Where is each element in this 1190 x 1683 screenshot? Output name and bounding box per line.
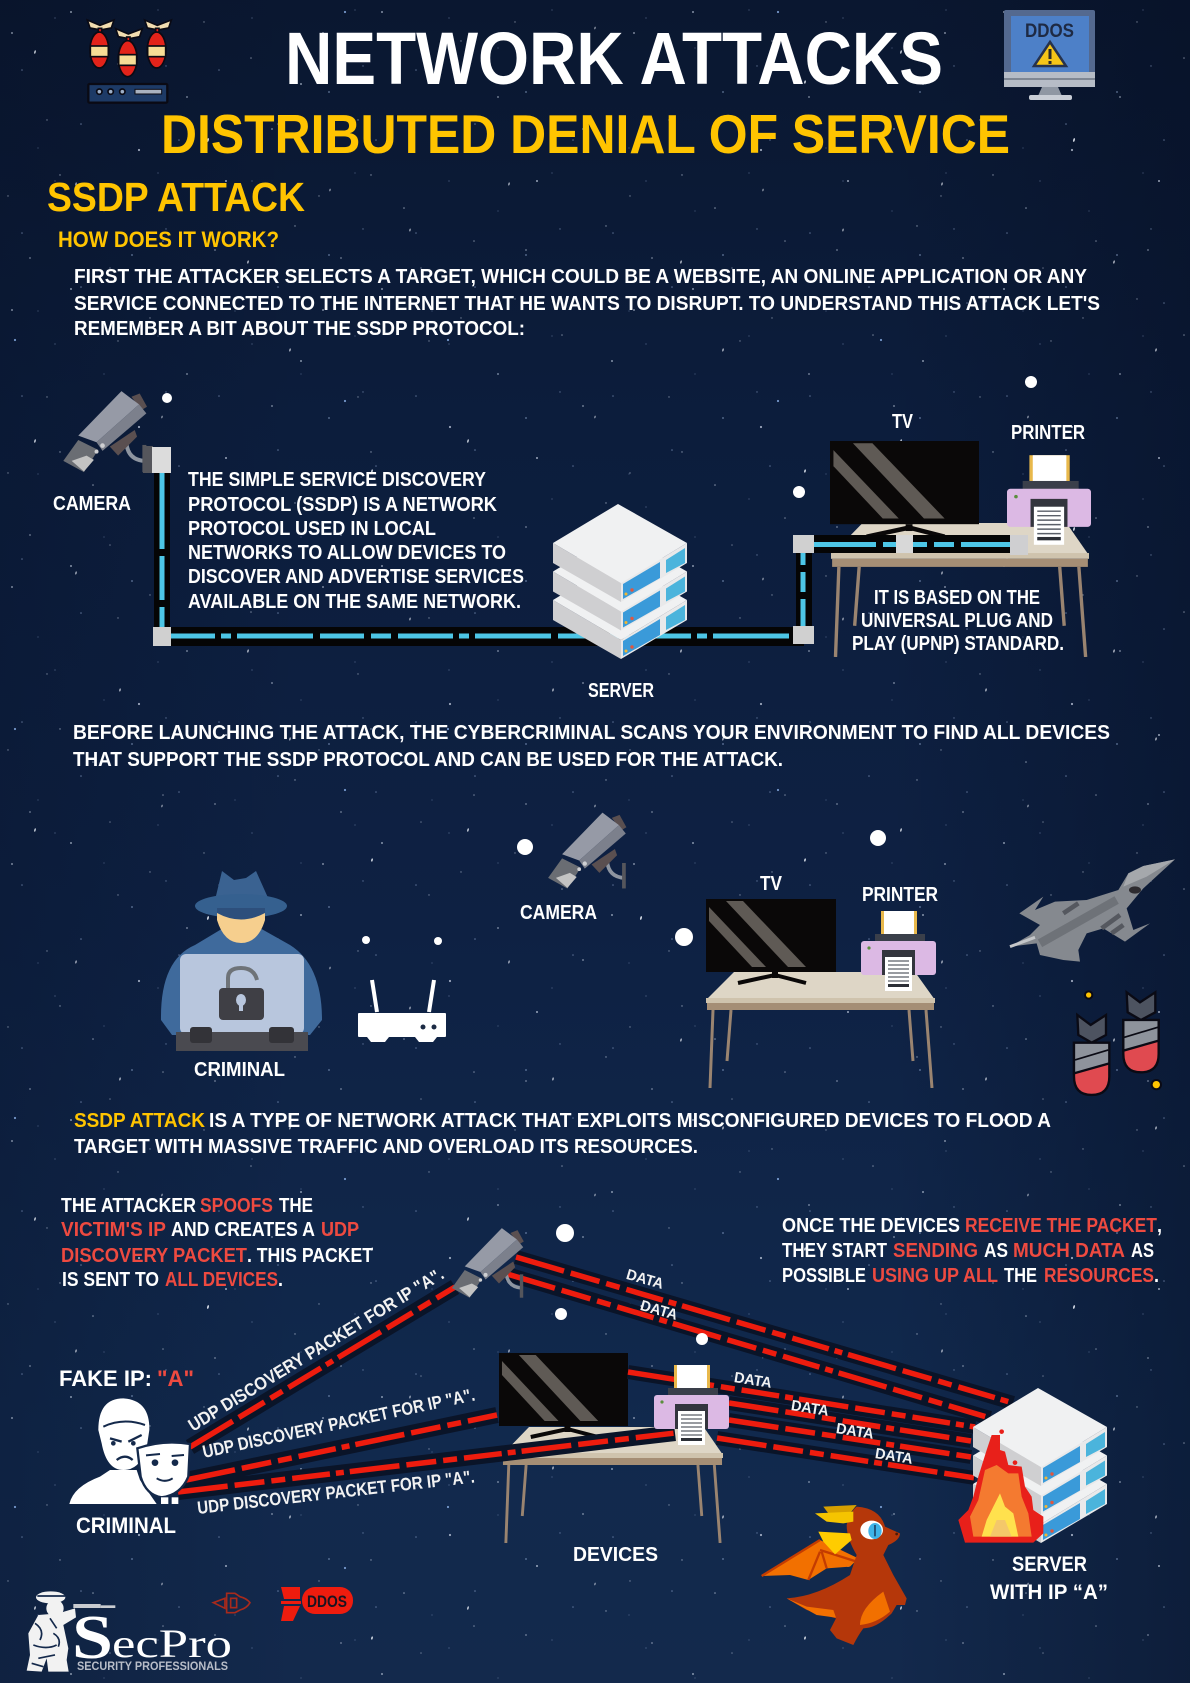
logo: SecPro: ecPro bbox=[112, 1621, 232, 1666]
icon: DDOS bomb bbox=[281, 1587, 353, 1621]
SSDP description: DISCOVER AND ADVERTISE SERVICES bbox=[188, 566, 524, 588]
label: fake IP: FAKE IP: bbox=[59, 1366, 152, 1391]
icon: falling bombs bbox=[1074, 991, 1161, 1095]
logo: SecPro: SECURITY PROFESSIONALS bbox=[77, 1661, 228, 1673]
devices explanation: , bbox=[1157, 1215, 1162, 1237]
SSDP attack definition bbox=[74, 1110, 1051, 1158]
icon: fighter jet bbox=[1010, 859, 1175, 962]
devices explanation: AS bbox=[984, 1240, 1008, 1262]
icon: camera bbox=[548, 813, 626, 888]
label: printer: PRINTER bbox=[1011, 422, 1085, 444]
devices explanation: ONCE THE DEVICES bbox=[782, 1215, 960, 1237]
label: printer: PRINTER bbox=[862, 884, 938, 906]
dot bbox=[793, 486, 805, 498]
title: NETWORK ATTACKS bbox=[285, 17, 943, 100]
icon: small rocket bbox=[213, 1593, 250, 1613]
devices explanation: POSSIBLE bbox=[782, 1265, 866, 1287]
scan paragraph: THAT SUPPORT THE SSDP PROTOCOL AND CAN BE USED FOR THE ATTACK. bbox=[73, 749, 783, 771]
devices explanation: SENDING bbox=[893, 1240, 978, 1262]
SSDP attack definition: SSDP ATTACK bbox=[74, 1110, 206, 1132]
attacker explanation: . THIS PACKET bbox=[247, 1245, 373, 1267]
UPnP note bbox=[852, 587, 1064, 655]
label: fake IP: "A" bbox=[157, 1366, 194, 1391]
dot bbox=[1025, 376, 1037, 388]
label: criminal: CRIMINAL bbox=[76, 1513, 176, 1538]
attacker explanation: THE ATTACKER bbox=[61, 1195, 196, 1217]
dot bbox=[434, 937, 442, 945]
scan paragraph: BEFORE LAUNCHING THE ATTACK, THE CYBERCRIMINAL SCANS YOUR ENVIRONMENT TO FIND ALL DEVICES bbox=[73, 722, 1110, 744]
attacker explanation: SPOOFS bbox=[200, 1195, 273, 1217]
SSDP description bbox=[188, 469, 524, 613]
devices explanation: THEY START bbox=[782, 1240, 887, 1262]
icon: dragon mascot bbox=[762, 1505, 907, 1645]
devices explanation bbox=[782, 1215, 1162, 1287]
data label: DATA bbox=[790, 1397, 830, 1420]
icon: DDOS monitor: DDOS bbox=[1025, 21, 1074, 42]
attacker explanation: VICTIM'S IP bbox=[61, 1219, 166, 1241]
intro paragraph bbox=[74, 266, 1100, 340]
dot bbox=[870, 830, 886, 846]
UDP label 1: UDP DISCOVERY PACKET FOR IP "A". bbox=[185, 1264, 447, 1435]
icon: camera bbox=[63, 391, 147, 472]
dot bbox=[556, 1224, 574, 1242]
icon: hooded criminal with laptop bbox=[161, 871, 322, 1051]
table with TV and printer bbox=[706, 899, 936, 1088]
SSDP description: PROTOCOL USED IN LOCAL bbox=[188, 518, 436, 540]
icon: printer bbox=[654, 1365, 729, 1445]
label: criminal: CRIMINAL bbox=[194, 1059, 285, 1081]
SSDP description: PROTOCOL (SSDP) IS A NETWORK bbox=[188, 494, 498, 516]
label: devices: DEVICES bbox=[573, 1544, 658, 1566]
label: camera: CAMERA bbox=[520, 902, 597, 924]
attacker explanation: AND CREATES A bbox=[171, 1219, 315, 1241]
icon: DDOS monitor bbox=[1004, 10, 1095, 100]
SSDP description: NETWORKS TO ALLOW DEVICES TO bbox=[188, 542, 506, 564]
dot bbox=[675, 928, 693, 946]
UDP label 2: UDP DISCOVERY PACKET FOR IP "A". bbox=[201, 1385, 477, 1462]
attacker explanation: . bbox=[278, 1269, 283, 1291]
attack lines: data flood bbox=[507, 1257, 1013, 1478]
UDP label 3: UDP DISCOVERY PACKET FOR IP "A". bbox=[196, 1467, 476, 1518]
devices explanation: . bbox=[1154, 1265, 1159, 1287]
data label: DATA bbox=[638, 1297, 680, 1324]
UPnP note: UNIVERSAL PLUG AND bbox=[861, 610, 1053, 632]
attacker explanation: DISCOVERY PACKET bbox=[61, 1245, 247, 1267]
label: fake IP bbox=[59, 1366, 194, 1391]
dot bbox=[162, 393, 172, 403]
heading: SSDP attack: SSDP ATTACK bbox=[47, 174, 305, 220]
attacker explanation: ALL DEVICES bbox=[165, 1269, 278, 1291]
intro paragraph: FIRST THE ATTACKER SELECTS A TARGET, WHICH COULD BE A WEBSITE, AN ONLINE APPLICATION OR ANY bbox=[74, 266, 1088, 288]
UPnP note: PLAY (UPNP) STANDARD. bbox=[852, 633, 1064, 655]
logo: SecPro bbox=[27, 1591, 232, 1673]
icon: DDOS bomb: DDOS bbox=[307, 1592, 347, 1611]
label: TV: TV bbox=[760, 873, 783, 895]
icon: camera bbox=[452, 1228, 524, 1298]
intro paragraph: REMEMBER A BIT ABOUT THE SSDP PROTOCOL: bbox=[74, 318, 525, 340]
dot bbox=[696, 1333, 708, 1345]
table with TV and printer bbox=[814, 441, 1091, 657]
label: camera: CAMERA bbox=[53, 493, 131, 515]
icon: criminal with mask bbox=[69, 1398, 190, 1504]
dot bbox=[517, 839, 533, 855]
data label: DATA bbox=[874, 1445, 914, 1468]
label: server with IP A bbox=[990, 1553, 1108, 1604]
devices explanation: RECEIVE THE PACKET bbox=[965, 1215, 1157, 1237]
attacker explanation: IS SENT TO bbox=[62, 1269, 159, 1291]
network diagram: cable connections bbox=[143, 446, 814, 646]
subtitle: DISTRIBUTED DENIAL OF SERVICE bbox=[161, 103, 1010, 165]
scan paragraph bbox=[73, 722, 1110, 771]
data label: DATA bbox=[733, 1369, 773, 1392]
data label: DATA bbox=[835, 1420, 875, 1443]
devices explanation: AS bbox=[1131, 1240, 1154, 1262]
icon: router bbox=[358, 980, 446, 1042]
label: server with IP A: WITH IP “A” bbox=[990, 1581, 1108, 1604]
attacker explanation: THE bbox=[279, 1195, 313, 1217]
table and TV bbox=[499, 1353, 723, 1543]
UPnP note: IT IS BASED ON THE bbox=[874, 587, 1040, 609]
icon: server on fire bbox=[958, 1388, 1107, 1543]
devices explanation: MUCH DATA bbox=[1013, 1240, 1125, 1262]
logo: SecPro: S bbox=[72, 1604, 113, 1672]
icon: three bombs over console bbox=[87, 20, 171, 103]
dot bbox=[555, 1308, 567, 1320]
intro paragraph: SERVICE CONNECTED TO THE INTERNET THAT HE WANTS TO DISRUPT. TO UNDERSTAND THIS ATTACK LET'S bbox=[74, 293, 1100, 315]
attack lines: UDP packets bbox=[178, 1287, 675, 1492]
label: TV: TV bbox=[892, 411, 914, 433]
SSDP attack definition: TARGET WITH MASSIVE TRAFFIC AND OVERLOAD ITS RESOURCES. bbox=[74, 1136, 698, 1158]
data label: DATA bbox=[624, 1266, 666, 1293]
devices explanation: USING UP ALL bbox=[872, 1265, 998, 1287]
icon: server bbox=[553, 504, 687, 659]
SSDP attack definition: IS A TYPE OF NETWORK ATTACK THAT EXPLOITS MISCONFIGURED DEVICES TO FLOOD A bbox=[209, 1110, 1051, 1132]
label: server: SERVER bbox=[588, 680, 654, 702]
devices explanation: THE bbox=[1004, 1265, 1037, 1287]
label: server with IP A: SERVER bbox=[1012, 1553, 1087, 1576]
dot bbox=[362, 936, 370, 944]
devices explanation: RESOURCES bbox=[1044, 1265, 1154, 1287]
subheading: how does it work: HOW DOES IT WORK? bbox=[58, 227, 279, 252]
attacker explanation bbox=[61, 1195, 373, 1291]
attacker explanation: UDP bbox=[321, 1219, 359, 1241]
SSDP description: AVAILABLE ON THE SAME NETWORK. bbox=[188, 591, 521, 613]
SSDP description: THE SIMPLE SERVICE DISCOVERY bbox=[188, 469, 487, 491]
